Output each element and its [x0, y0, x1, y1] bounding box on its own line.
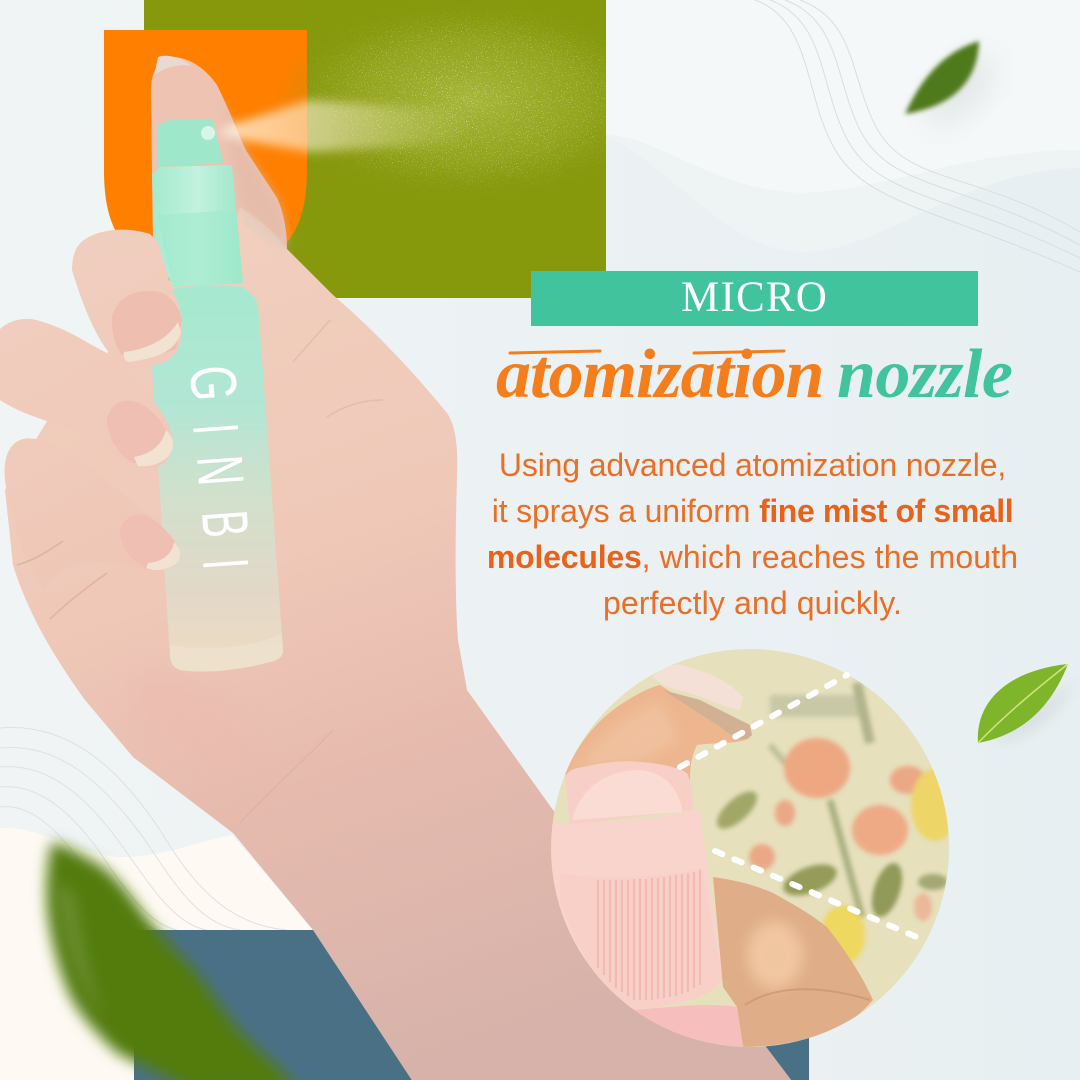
- cream corner shape: [0, 828, 313, 1080]
- olive rectangle: [144, 0, 606, 298]
- heading brush strokes: [510, 351, 784, 353]
- brand lettering: [176, 363, 262, 572]
- pink bottle shoulder: [633, 1005, 743, 1050]
- banner: MICRO: MICRO: [681, 274, 828, 321]
- nozzle: [157, 119, 223, 167]
- bottle body: [149, 286, 283, 672]
- heading: atomization nozzle: atomization: [496, 336, 823, 413]
- heading: atomization nozzle: nozzle: [837, 336, 1012, 413]
- threaded collar: [152, 165, 243, 287]
- wavy line decoration top right: [755, 0, 1080, 272]
- leaf right: [978, 664, 1075, 745]
- index finger behind the bottle: [151, 57, 287, 260]
- finger three: [5, 438, 179, 590]
- lower finger: [713, 877, 873, 1047]
- blurred leaf top right: [905, 41, 1007, 137]
- bottle: [149, 119, 283, 672]
- nail three: [120, 515, 180, 569]
- finger two: [0, 319, 173, 468]
- bottle base band: [170, 634, 283, 672]
- banner: MICRO: [531, 271, 978, 326]
- brand lettering: I: [188, 556, 262, 572]
- collar ribs: [598, 870, 700, 1000]
- palm shading and creases: [115, 56, 383, 823]
- brand lettering: G: [176, 363, 251, 403]
- hand palm and wrist: [5, 207, 795, 1080]
- finger one: [72, 230, 182, 368]
- body text: molecules, which reaches the mouth: [487, 539, 1018, 575]
- circular nozzle photo: [550, 648, 959, 1050]
- pink collar: [552, 810, 722, 971]
- nail one: [112, 291, 182, 358]
- upper finger: [565, 685, 750, 780]
- orange shield: [104, 30, 307, 250]
- acrylic nail: [663, 690, 752, 739]
- wavy line decoration bottom left: [0, 727, 287, 930]
- fingers in front of bottle: [0, 230, 182, 619]
- dashed nozzle lines: [680, 675, 926, 941]
- blurred leaf bottom left: [47, 842, 300, 1080]
- floral backdrop: [711, 683, 959, 965]
- nozzle hole: [201, 126, 215, 140]
- nail two: [107, 401, 173, 463]
- body text: [487, 447, 1018, 621]
- body text: it sprays a uniform fine mist of small: [492, 493, 1013, 529]
- spray beam: [222, 100, 470, 152]
- brand lettering: N: [183, 453, 257, 488]
- brand lettering: I: [178, 421, 252, 437]
- finger creases: [17, 541, 107, 619]
- body text: Using advanced atomization nozzle,: [499, 447, 1006, 483]
- brand lettering: B: [188, 508, 261, 540]
- heading: atomization nozzle: [496, 336, 1012, 413]
- mist cloud on olive: [287, 4, 606, 196]
- body text: perfectly and quickly.: [603, 585, 902, 621]
- pink nozzle top: [565, 761, 693, 825]
- blue rectangle: [134, 930, 809, 1080]
